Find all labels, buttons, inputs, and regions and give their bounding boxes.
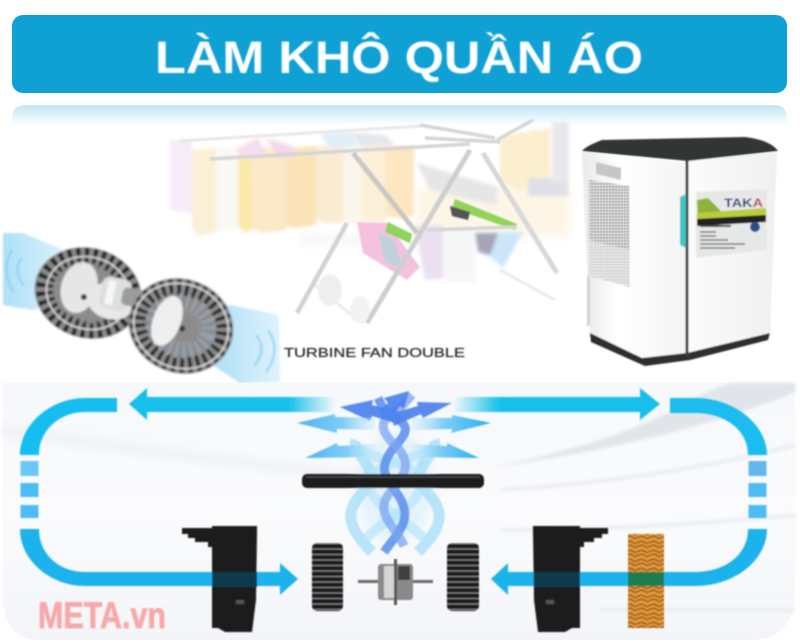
seam — [686, 160, 688, 356]
dark blue top arrows — [340, 391, 452, 426]
arrow: top right outflow — [453, 388, 660, 420]
left fan housing — [182, 526, 257, 632]
arrow: left loop top — [20, 398, 117, 455]
arrow: right loop dashes — [748, 461, 766, 518]
product: dehumidifier — [582, 137, 778, 366]
filter bar — [302, 474, 484, 488]
right fan housing — [533, 526, 608, 632]
base — [590, 333, 770, 366]
left wheel — [24, 236, 152, 350]
top panel — [582, 137, 778, 161]
airflow right — [205, 300, 280, 383]
product label: TAK A — [724, 196, 763, 210]
right blower wheel — [447, 543, 479, 611]
motor — [358, 559, 433, 605]
orange filter element — [628, 534, 664, 628]
vent grille — [589, 180, 630, 287]
title text: LÀM KHÔ QUẦN ÁO — [155, 32, 643, 83]
airflow helix — [351, 395, 439, 552]
teal indicator strip — [680, 194, 686, 248]
arrow: left loop into fan — [20, 529, 298, 595]
arrow: left loop dashes — [20, 461, 38, 518]
title banner — [12, 15, 787, 93]
handle — [596, 162, 621, 180]
arrow: right loop top — [670, 398, 767, 455]
light blue side arrows — [297, 414, 491, 458]
label: turbine fan double: TURBINE FAN DOUBLE — [284, 345, 465, 360]
panel: airflow diagram — [0, 383, 796, 640]
side slot — [587, 276, 590, 326]
front face — [688, 152, 777, 353]
right wheel — [115, 264, 247, 388]
axle — [97, 275, 149, 316]
left face — [582, 152, 687, 360]
product label — [696, 189, 767, 258]
arrow: top left outflow — [129, 388, 335, 420]
illustration: clothes drying rack — [170, 120, 570, 324]
watermark: META.vn — [38, 595, 166, 636]
left blower wheel — [312, 543, 343, 611]
fading band under title — [12, 105, 787, 125]
icon: turbine fan double — [3, 233, 280, 388]
arrow: right loop into fan — [491, 529, 767, 595]
panel background — [3, 383, 796, 640]
airflow left — [3, 233, 63, 310]
